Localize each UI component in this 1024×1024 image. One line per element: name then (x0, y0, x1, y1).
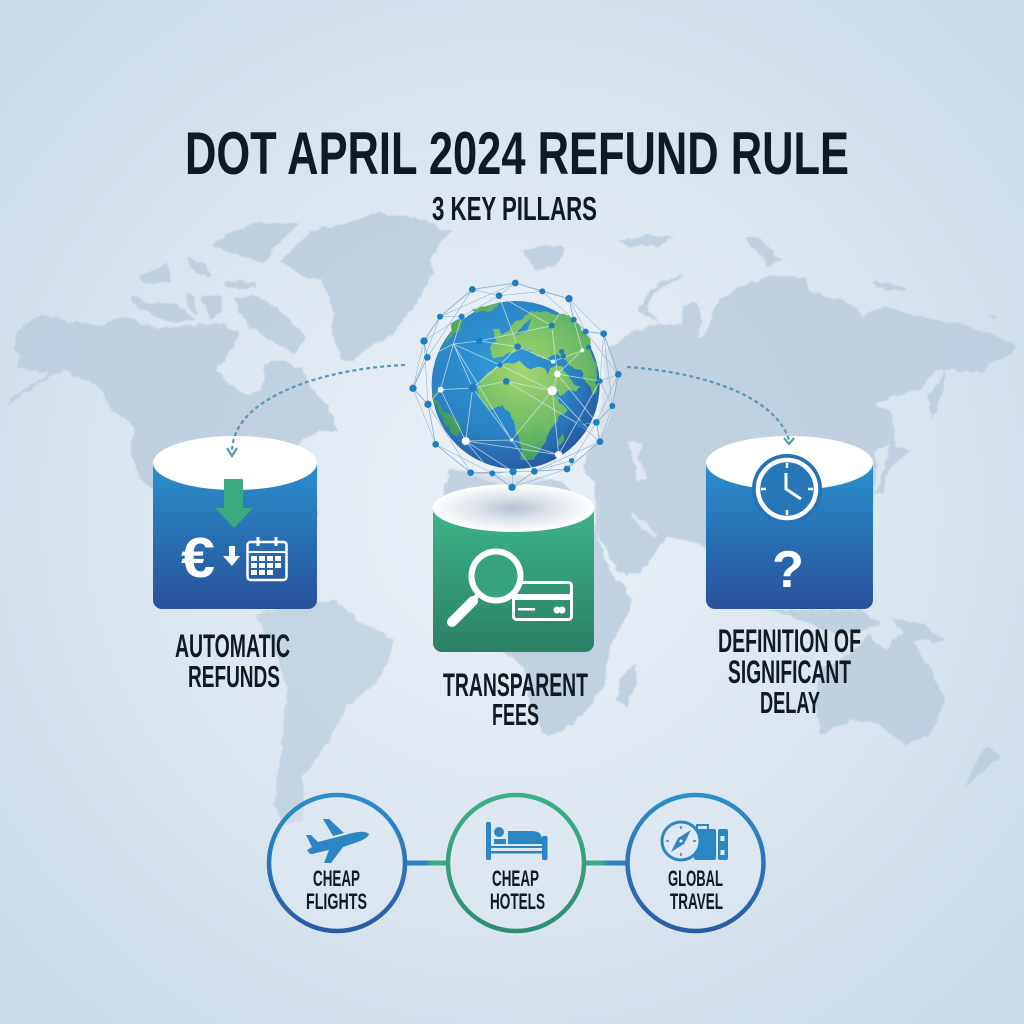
icon: calendar (248, 537, 286, 580)
arrow: globe to significant delay (627, 367, 794, 444)
globe halo (416, 285, 616, 485)
icon: clock (752, 454, 822, 524)
label: automatic refunds: REFUNDS (188, 659, 280, 694)
text: cheap hotels (490, 866, 545, 914)
subtitle: 3 KEY PILLARS (432, 190, 597, 227)
label: definition of significant delay: SIGNIFICANT (728, 654, 851, 690)
text: cheap flights (306, 866, 367, 914)
icon: bed (486, 822, 548, 860)
icon: credit card (514, 582, 572, 620)
icon: question mark: ? (772, 541, 804, 599)
arrow: globe to automatic refunds (227, 365, 405, 456)
pillar: definition of significant delay (706, 436, 873, 609)
text: global travel (668, 866, 723, 914)
badge: cheap hotels (448, 795, 584, 931)
label: transparent fees: TRANSPARENT (443, 667, 588, 703)
pillar: automatic refunds (153, 436, 317, 609)
connector lines (407, 860, 626, 866)
pillar: transparent fees (432, 484, 594, 652)
globe with network (409, 280, 622, 491)
network nodes (409, 280, 622, 491)
text: cheap flights: CHEAP (313, 866, 360, 891)
text: cheap hotels: CHEAP (492, 866, 539, 891)
label: definition of significant delay (718, 623, 861, 720)
network lines (413, 283, 618, 487)
text: global travel: GLOBAL (668, 866, 723, 891)
icon: magnifying glass (452, 552, 520, 622)
label: transparent fees (443, 667, 588, 732)
text: cheap flights: FLIGHTS (306, 889, 367, 914)
icon: suitcase and compass (662, 822, 728, 860)
text: cheap hotels: HOTELS (490, 889, 545, 914)
label: transparent fees: FEES (492, 697, 539, 732)
label: definition of significant delay: DELAY (760, 685, 820, 720)
world map (5, 213, 1015, 825)
icon: euro sign: € (181, 526, 215, 590)
label: automatic refunds: AUTOMATIC (175, 628, 290, 664)
icon: small down arrow (223, 546, 240, 566)
badge: global travel (628, 795, 764, 931)
text: global travel: TRAVEL (670, 889, 723, 914)
label: definition of significant delay: DEFINITION OF (718, 623, 861, 659)
badge: cheap flights (269, 795, 405, 931)
label: automatic refunds (175, 628, 290, 694)
icon: green down arrow (215, 479, 253, 528)
icon: airplane (306, 819, 369, 863)
globe sphere (432, 301, 600, 469)
